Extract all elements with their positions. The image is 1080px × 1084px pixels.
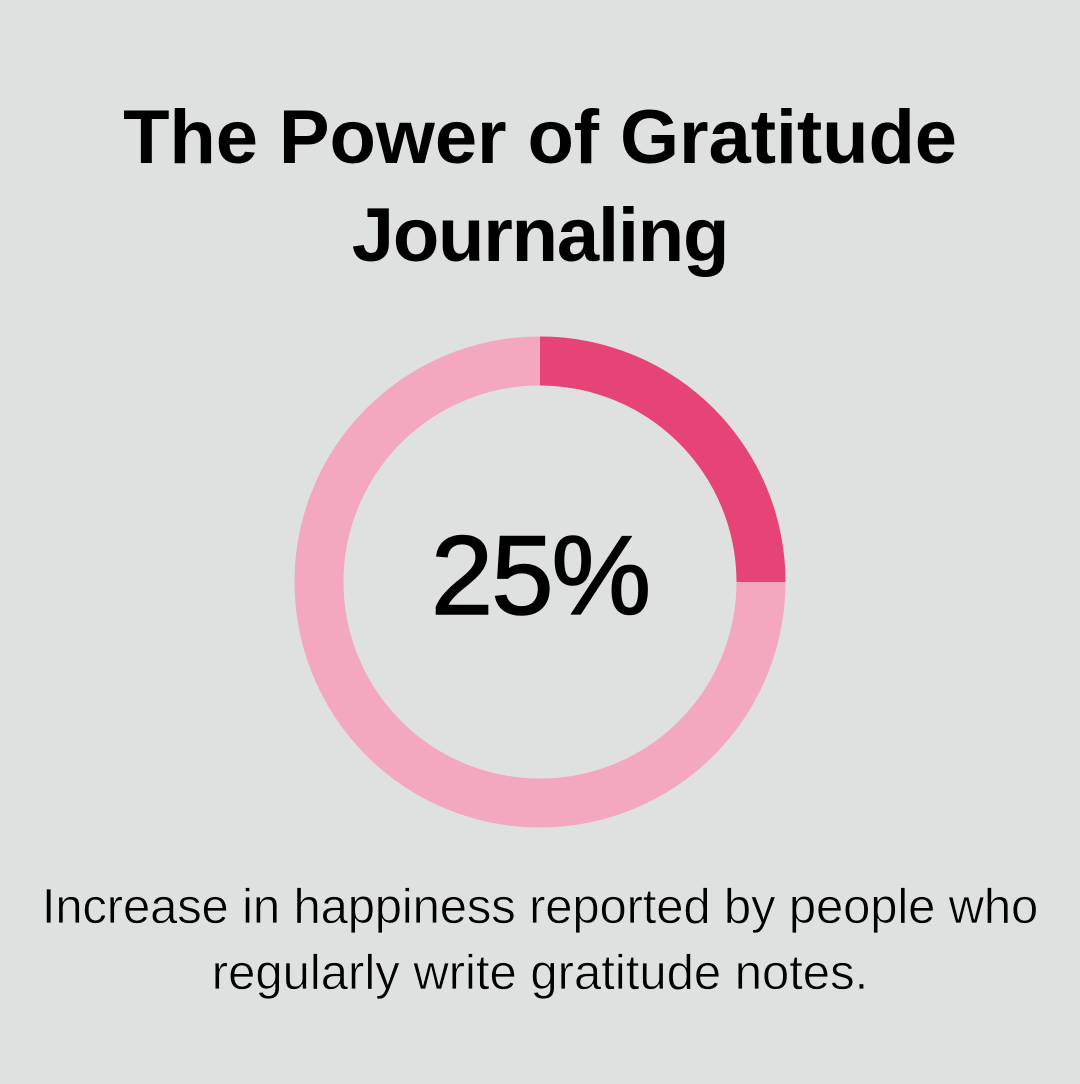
title: Journaling [352,193,728,278]
value: 25%: 25% [431,513,649,638]
ring: remainder 75% [319,361,761,803]
description text: Increase in happiness reported by people who [42,880,1038,934]
title [123,95,957,278]
description text [42,880,1038,1000]
donut chart [294,336,786,828]
ring: highlighted 25% [540,336,786,582]
title: The Power of Gratitude [123,95,957,180]
description text: regularly write gratitude notes. [212,946,868,1000]
